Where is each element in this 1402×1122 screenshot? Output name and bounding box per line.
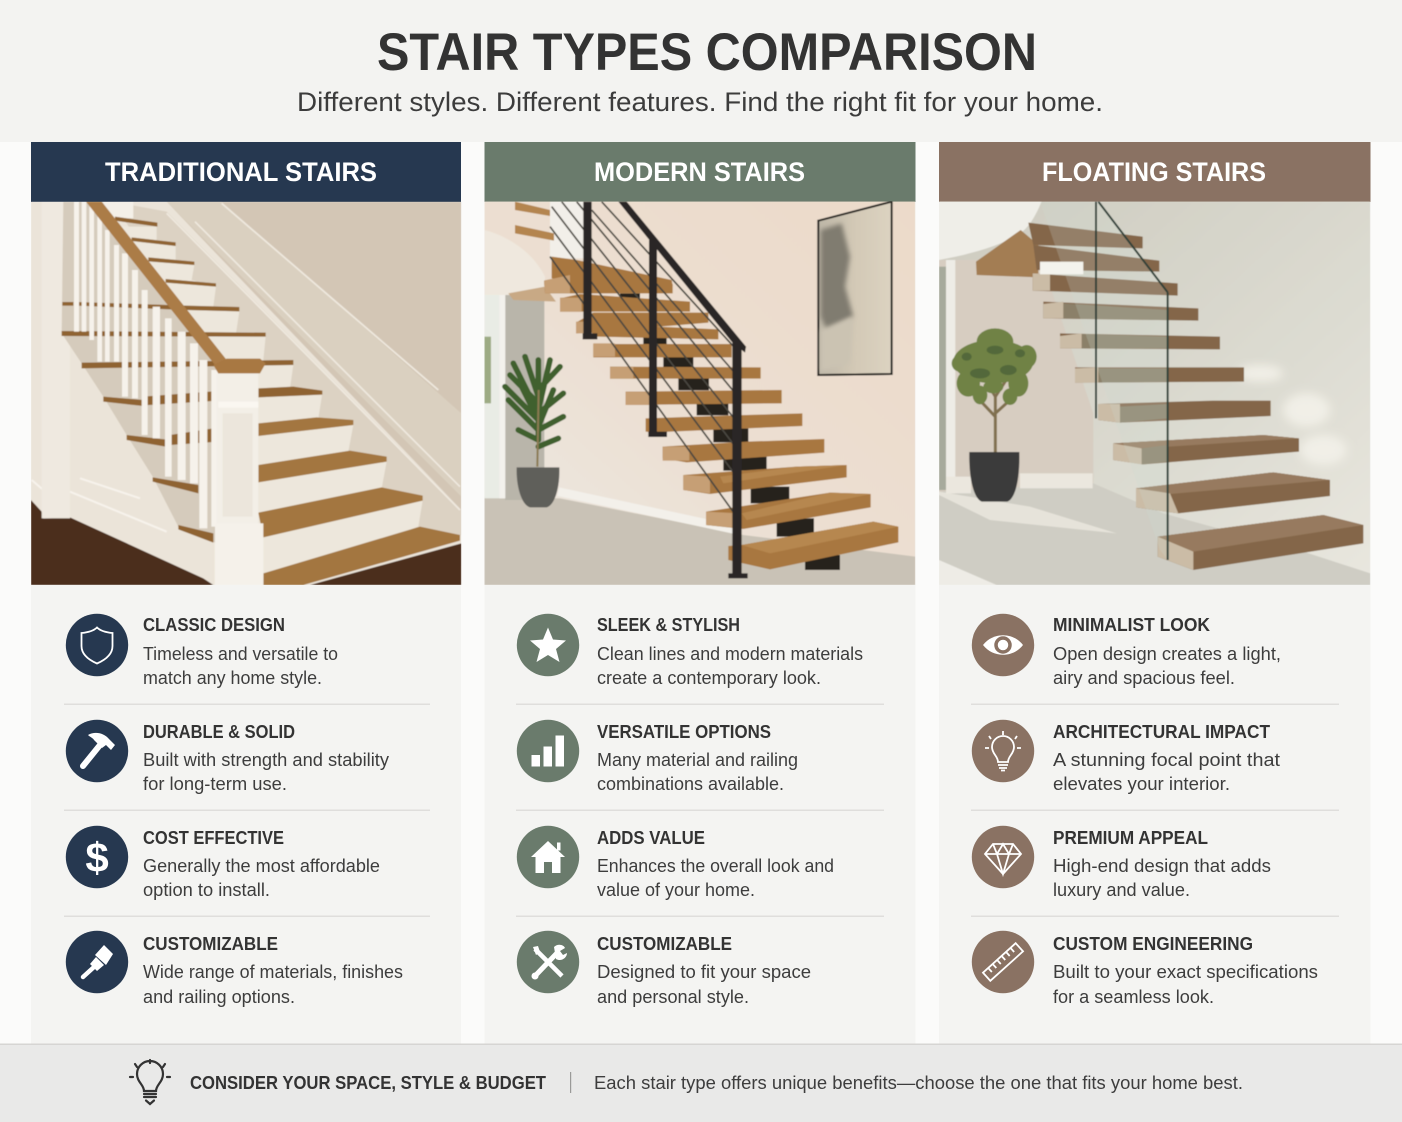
- text: customizable: Wide range of materials, finishes: [143, 962, 403, 982]
- panel: floating stairs: [939, 142, 1370, 1044]
- text: versatile options: combinations available.: [597, 774, 784, 794]
- photo: traditional staircase: [31, 202, 461, 585]
- text: versatile options: VERSATILE OPTIONS: [597, 722, 771, 742]
- text: premium appeal: [1053, 828, 1271, 900]
- balusters: [74, 202, 218, 528]
- feature: sleek and stylish: [517, 614, 863, 688]
- text: customizable: CUSTOMIZABLE: [143, 934, 278, 954]
- icon: eye: [972, 614, 1034, 676]
- icon: dollar: $: [85, 834, 109, 881]
- text: sleek and stylish: SLEEK & STYLISH: [597, 615, 740, 635]
- stringer blocks: [620, 293, 840, 570]
- text: classic design: [143, 615, 338, 688]
- traditional heading: TRADITIONAL STAIRS: [105, 157, 377, 187]
- handrail: [86, 202, 227, 365]
- text: premium appeal: High-end design that adds: [1053, 856, 1271, 876]
- text: adds value: Enhances the overall look and: [597, 856, 834, 876]
- traditional heading: [31, 142, 461, 202]
- subtitle: Different styles. Different features. Find the right fit for your home.: [297, 87, 1103, 117]
- footer text: Each stair type offers unique benefits—choose the one that fits your home best.: [594, 1073, 1243, 1093]
- text: customizable: [143, 934, 403, 1007]
- text: classic design: Timeless and versatile to: [143, 644, 338, 664]
- feature list: modern: [516, 614, 884, 1007]
- text: customizable: and railing options.: [143, 987, 295, 1007]
- text: customizable: [597, 934, 811, 1007]
- lower treads: [258, 417, 460, 585]
- text: premium appeal: PREMIUM APPEAL: [1053, 828, 1208, 848]
- risers: [115, 227, 423, 585]
- icon: tools: [517, 931, 579, 993]
- text: versatile options: Many material and railing: [597, 750, 798, 770]
- text: custom engineering: [1053, 934, 1318, 1007]
- posts and rail: [583, 202, 748, 578]
- plant pot: [969, 452, 1019, 502]
- feature: durable and solid: [66, 720, 389, 794]
- text: sleek and stylish: [597, 615, 863, 688]
- text: classic design: match any home style.: [143, 668, 322, 688]
- glassed tread areas: [1063, 303, 1168, 464]
- feature: custom engineering: [941, 900, 1318, 1024]
- feature: customizable: [66, 931, 403, 1007]
- text: adds value: ADDS VALUE: [597, 828, 705, 848]
- text: architectural impact: A stunning focal point that: [1053, 750, 1280, 770]
- upper treads: [62, 217, 322, 543]
- icon: dollar: [66, 826, 128, 888]
- feature list: floating: [941, 614, 1339, 1024]
- plant: [505, 357, 563, 447]
- title: STAIR TYPES COMPARISON: [377, 23, 1037, 82]
- icon: footer light bulb: [130, 1060, 170, 1104]
- text: versatile options: [597, 722, 798, 794]
- feature: customizable: [517, 931, 811, 1007]
- text: cost effective: Generally the most affordable: [143, 856, 380, 876]
- floating heading: FLOATING STAIRS: [1042, 157, 1266, 187]
- photo: modern staircase: [484, 201, 915, 585]
- panel: traditional stairs: [31, 142, 461, 1044]
- treads: [544, 257, 898, 569]
- icon: paint brush: [66, 931, 128, 993]
- text: cost effective: COST EFFECTIVE: [143, 828, 284, 848]
- tread top faces: [1113, 435, 1363, 552]
- feature: versatile options: [517, 720, 798, 794]
- tread top faces: [720, 465, 898, 553]
- modern heading: [484, 142, 916, 202]
- icon: diamond: [972, 826, 1034, 888]
- text: durable and solid: DURABLE & SOLID: [143, 722, 295, 742]
- feature: classic design: [66, 614, 338, 688]
- icon: hammer: [66, 720, 128, 782]
- text: architectural impact: [1053, 722, 1280, 794]
- text: custom engineering: Built to your exact specifications: [1053, 962, 1318, 982]
- plant: [981, 382, 1008, 453]
- footer heading: CONSIDER YOUR SPACE, STYLE & BUDGET: [190, 1073, 546, 1093]
- modern heading: MODERN STAIRS: [594, 157, 805, 187]
- photo: floating staircase: [939, 201, 1370, 585]
- newel post: [217, 373, 258, 525]
- icon: shield: [66, 614, 128, 676]
- text: minimalist look: Open design creates a light,: [1053, 644, 1281, 664]
- text: customizable: Designed to fit your space: [597, 962, 811, 982]
- text: sleek and stylish: create a contemporary look.: [597, 668, 821, 688]
- feature list: traditional: [64, 614, 430, 1007]
- text: durable and solid: for long-term use.: [143, 774, 287, 794]
- glass posts: [1096, 202, 1168, 560]
- text: durable and solid: Built with strength and stability: [143, 750, 389, 770]
- feature: architectural impact: [972, 720, 1280, 794]
- tread ends: [1033, 273, 1193, 570]
- text: durable and solid: [143, 722, 389, 794]
- footer band: [0, 1044, 1402, 1122]
- wall opening with cable rail: [550, 202, 583, 258]
- page header: [0, 0, 1402, 142]
- glass panel: [1048, 225, 1167, 556]
- text: cost effective: option to install.: [143, 880, 270, 900]
- floating heading: [939, 142, 1370, 202]
- text: sleek and stylish: Clean lines and modern materials: [597, 644, 863, 664]
- feature: premium appeal: [972, 826, 1271, 900]
- text: minimalist look: [1053, 615, 1281, 688]
- text: architectural impact: elevates your interior.: [1053, 774, 1230, 794]
- icon: ruler: [941, 900, 1065, 1024]
- icon: house: [517, 826, 579, 888]
- text: custom engineering: CUSTOM ENGINEERING: [1053, 934, 1253, 954]
- painting: [818, 202, 892, 375]
- text: customizable: and personal style.: [597, 987, 749, 1007]
- cables: [550, 202, 737, 517]
- text: classic design: CLASSIC DESIGN: [143, 615, 285, 635]
- feature: minimalist look: [972, 614, 1281, 688]
- pot: [517, 467, 559, 507]
- feature: cost effective: [66, 826, 380, 900]
- text: adds value: [597, 828, 834, 900]
- text: customizable: CUSTOMIZABLE: [597, 934, 732, 954]
- light streaks: [1283, 393, 1330, 427]
- tread ends: [544, 275, 742, 528]
- feature: adds value: [517, 826, 834, 900]
- treads: [1028, 223, 1363, 570]
- text: cost effective: [143, 828, 380, 900]
- text: adds value: value of your home.: [597, 880, 755, 900]
- text: minimalist look: MINIMALIST LOOK: [1053, 615, 1210, 635]
- text: premium appeal: luxury and value.: [1053, 880, 1190, 900]
- text: custom engineering: for a seamless look.: [1053, 987, 1214, 1007]
- icon: star: [517, 614, 579, 676]
- landing soffit: [976, 230, 1038, 277]
- shaded area behind balusters: [62, 202, 220, 543]
- panel: modern stairs: [484, 142, 916, 1044]
- text: minimalist look: airy and spacious feel.: [1053, 668, 1235, 688]
- icon: bar chart: [517, 720, 579, 782]
- text: architectural impact: ARCHITECTURAL IMPACT: [1053, 722, 1270, 742]
- icon: light bulb: [972, 720, 1034, 782]
